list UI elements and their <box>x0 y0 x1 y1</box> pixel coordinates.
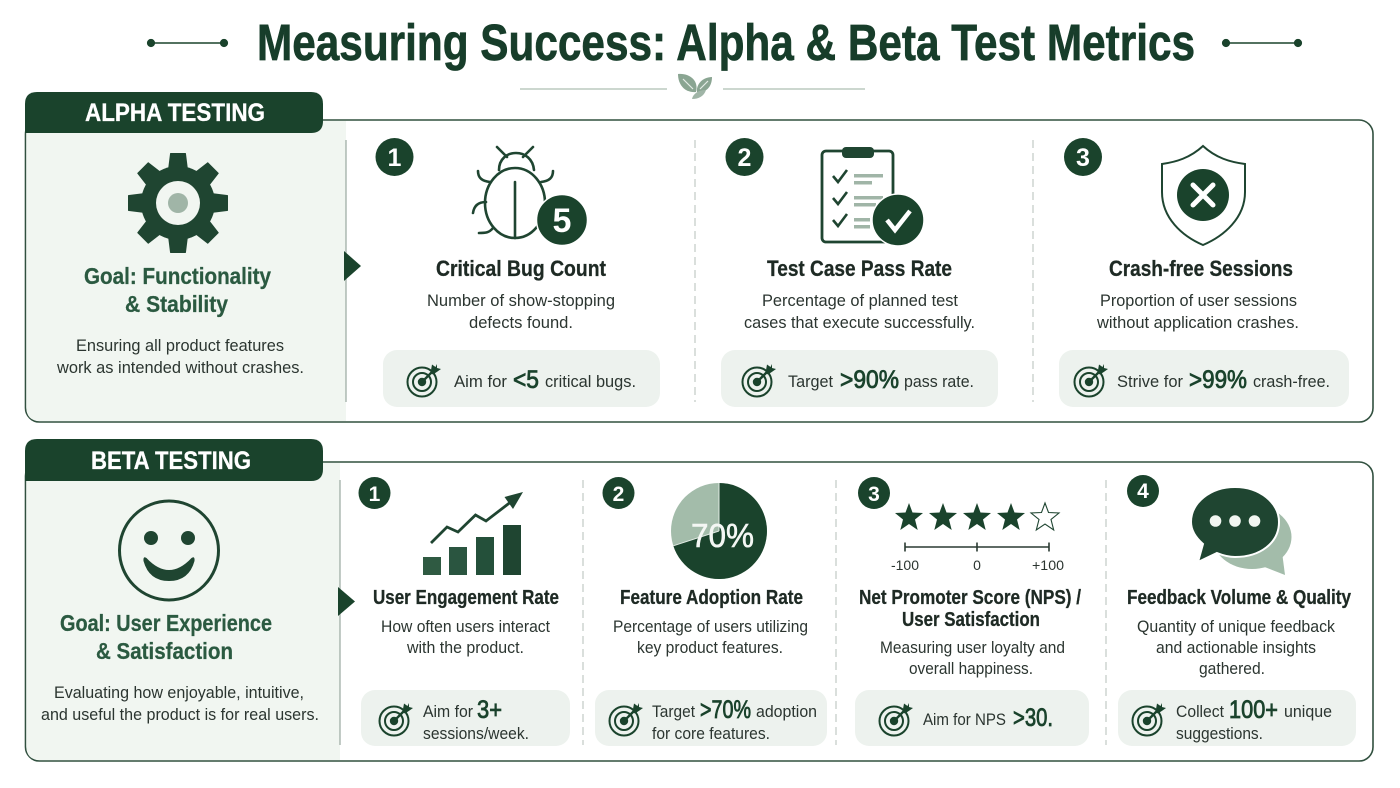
number badge 1: 1 <box>369 483 381 506</box>
metric description: gathered. <box>1199 660 1265 678</box>
metric: user engagement rate <box>358 477 570 746</box>
icon: 70 percent pie chart <box>671 483 767 579</box>
number badge 4: 4 <box>1137 480 1149 503</box>
metric description: overall happiness. <box>909 660 1033 678</box>
target callout: for core features. <box>652 725 770 743</box>
metric: critical bug count <box>376 138 660 407</box>
title ornament: left <box>147 39 228 47</box>
beta goal heading: Goal: User Experience <box>60 610 272 636</box>
icon: smiley face <box>120 501 218 600</box>
number badge 2: 2 <box>738 144 751 172</box>
panel: beta testing <box>25 439 1373 761</box>
metric heading: Crash-free Sessions <box>1109 256 1293 281</box>
panel: alpha testing <box>25 92 1373 422</box>
beta goal description: and useful the product is for real users. <box>41 705 319 724</box>
metric heading: User Satisfaction <box>902 609 1040 631</box>
metric: crash-free sessions <box>1059 138 1349 407</box>
target callout: sessions/week. <box>423 725 529 743</box>
target callout: 3+ <box>477 696 502 724</box>
icon: shield with X <box>1162 146 1245 245</box>
title ornament: right <box>1222 39 1302 47</box>
alpha header tab: ALPHA TESTING <box>85 99 265 127</box>
metric heading: User Engagement Rate <box>373 587 559 609</box>
icon: bug with 5 badge: 5 <box>553 202 571 240</box>
metric description <box>427 292 615 332</box>
target callout: unique <box>1284 703 1332 721</box>
icon: gear <box>128 153 228 253</box>
metric description: and actionable insights <box>1156 639 1316 657</box>
beta card outline <box>26 462 1373 761</box>
target callout: >30. <box>1013 704 1053 732</box>
alpha goal description: work as intended without crashes. <box>56 358 304 377</box>
target callout: Aim for <box>423 703 473 721</box>
target callout <box>361 690 570 746</box>
metric description: Percentage of users utilizing <box>613 618 808 636</box>
target callout: <5 <box>513 366 539 394</box>
target callout: 100+ <box>1229 696 1278 724</box>
metric heading: Feature Adoption Rate <box>620 587 803 609</box>
target callout: Strive for <box>1117 373 1183 391</box>
number badge 2 <box>726 138 764 176</box>
target callout <box>1118 690 1356 746</box>
target callout: suggestions. <box>1176 725 1263 743</box>
alpha goal description <box>56 336 304 377</box>
metric heading: Net Promoter Score (NPS) / <box>859 587 1081 609</box>
metric description: cases that execute successfully. <box>744 314 975 332</box>
title: Measuring Success: Alpha & Beta Test Metrics <box>257 14 1195 71</box>
title divider with leaf icon <box>520 74 865 99</box>
icon: star rating <box>895 503 1059 530</box>
icon: rising bar chart <box>423 492 523 575</box>
target callout: >90% <box>840 366 899 394</box>
icon: 70 percent pie chart: 70% <box>691 517 754 554</box>
NPS scale: 0 <box>973 557 981 573</box>
target callout: Aim for <box>454 373 508 391</box>
metric description: key product features. <box>637 639 783 657</box>
number badge 3 <box>858 477 890 509</box>
metric heading: Critical Bug Count <box>436 256 607 281</box>
target callout <box>383 350 660 407</box>
target callout: Collect <box>1176 703 1224 721</box>
metric description: Proportion of user sessions <box>1100 292 1297 310</box>
target callout: Aim for NPS <box>923 711 1006 729</box>
metric description: Measuring user loyalty and <box>880 639 1065 657</box>
number badge 3: 3 <box>1076 144 1090 172</box>
icon: bug with 5 badge <box>473 147 588 246</box>
beta goal panel background <box>26 463 340 760</box>
target callout: crash-free. <box>1253 373 1330 391</box>
target callout: adoption <box>756 703 817 721</box>
metric description: Number of show-stopping <box>427 292 615 310</box>
metric: test case pass rate <box>721 138 998 407</box>
NPS scale <box>891 542 1064 573</box>
alpha goal heading: Goal: Functionality <box>84 263 271 289</box>
metric description <box>1096 292 1299 332</box>
beta header tab: BETA TESTING <box>91 447 251 475</box>
target callout: Target <box>652 703 695 721</box>
metric: net promoter score <box>855 477 1089 746</box>
metric description <box>744 292 975 332</box>
number badge 2 <box>602 477 634 509</box>
number badge 2: 2 <box>613 483 624 506</box>
metric description: defects found. <box>469 314 573 332</box>
number badge 1 <box>376 138 414 176</box>
beta header tab <box>25 439 323 481</box>
icon: clipboard with check badge <box>822 147 924 246</box>
metric heading: Test Case Pass Rate <box>767 256 952 281</box>
alpha header tab <box>25 92 323 133</box>
metric description: Quantity of unique feedback <box>1137 618 1336 636</box>
target callout: >99% <box>1189 366 1247 394</box>
alpha goal heading <box>84 263 271 317</box>
target callout: >70% <box>700 696 751 724</box>
metric description <box>1137 618 1336 678</box>
target callout <box>721 350 998 407</box>
metric: feature adoption rate <box>595 477 827 746</box>
beta goal description: Evaluating how enjoyable, intuitive, <box>54 683 304 702</box>
icon: chat bubbles <box>1191 487 1292 575</box>
arrow: beta goal to metrics <box>338 587 355 616</box>
target callout <box>1059 350 1349 407</box>
target callout: Target <box>788 373 833 391</box>
metric heading <box>859 587 1081 631</box>
alpha goal heading: & Stability <box>125 291 228 317</box>
metric description <box>381 618 550 657</box>
number badge 4 <box>1127 475 1159 507</box>
beta goal heading: & Satisfaction <box>96 638 233 664</box>
metric description: with the product. <box>406 639 524 657</box>
target callout: critical bugs. <box>545 373 636 391</box>
metric description: How often users interact <box>381 618 550 636</box>
beta goal description <box>41 683 319 724</box>
number badge 3 <box>1064 138 1102 176</box>
number badge 3: 3 <box>868 483 880 506</box>
metric: feedback volume and quality <box>1118 475 1356 746</box>
target callout <box>595 690 827 746</box>
number badge 1: 1 <box>388 144 402 172</box>
NPS scale: -100 <box>891 557 919 573</box>
number badge 1 <box>358 477 390 509</box>
metric description <box>880 639 1065 678</box>
alpha goal panel background <box>26 121 346 421</box>
beta goal heading <box>60 610 272 664</box>
alpha card outline <box>26 120 1373 422</box>
metric description <box>613 618 808 657</box>
target callout: pass rate. <box>904 373 974 391</box>
metric description: without application crashes. <box>1096 314 1299 332</box>
arrow: alpha goal to metrics <box>344 251 361 281</box>
target callout <box>855 690 1089 746</box>
metric description: Percentage of planned test <box>762 292 958 310</box>
NPS scale: +100 <box>1032 557 1064 573</box>
alpha goal description: Ensuring all product features <box>76 336 284 355</box>
metric heading: Feedback Volume & Quality <box>1127 587 1352 609</box>
